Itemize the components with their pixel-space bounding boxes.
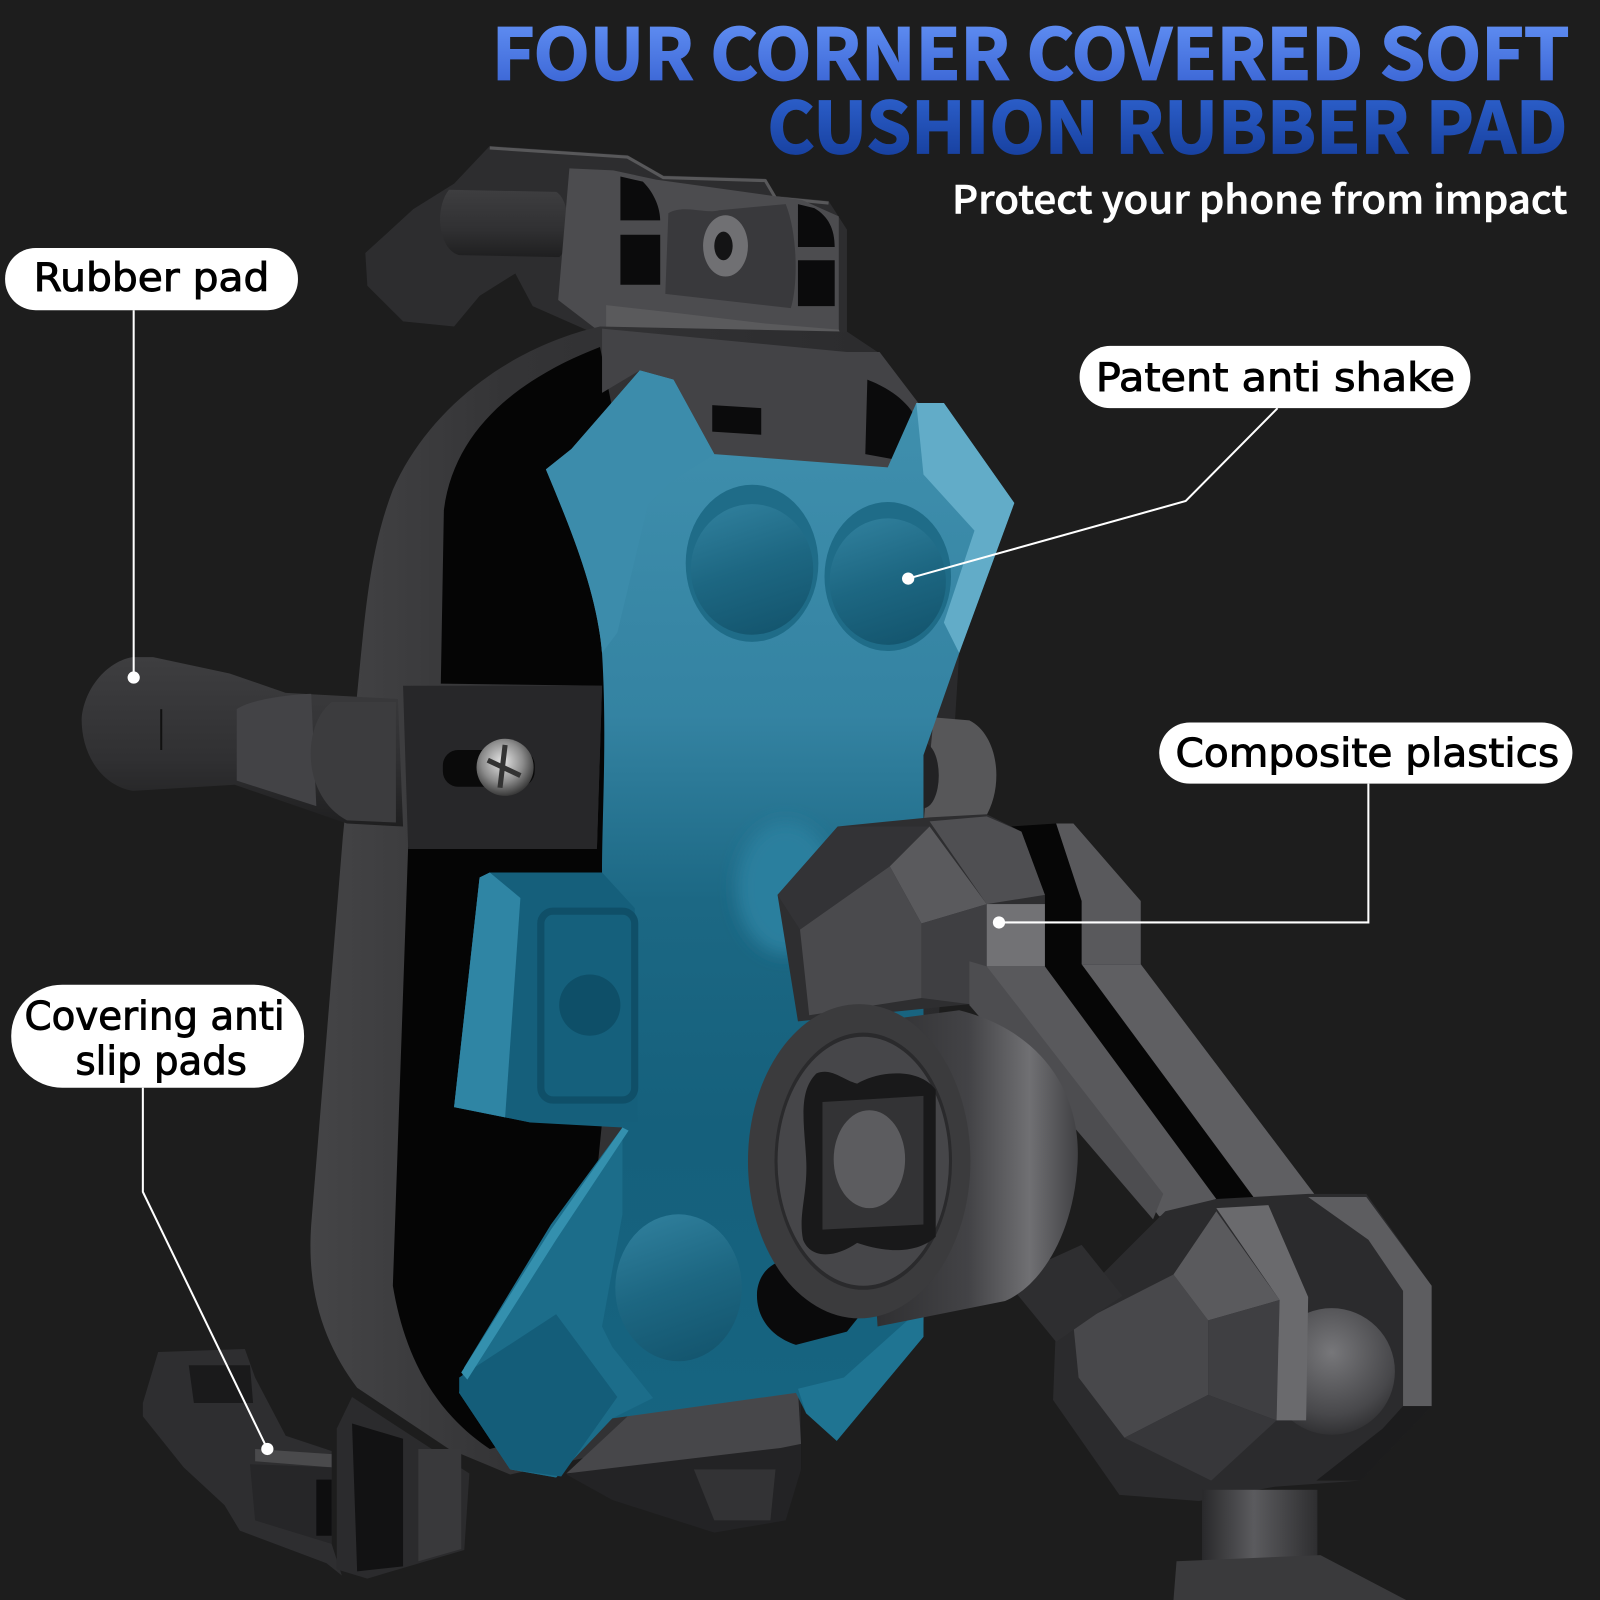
small tab behind pad xyxy=(908,717,996,824)
side mounting plate xyxy=(403,686,602,849)
bottom right clamp arm xyxy=(566,1388,801,1533)
subtitle: Protect your phone from impact xyxy=(952,169,1567,225)
callout: composite plastics xyxy=(993,722,1572,929)
bottom joint xyxy=(1053,1194,1432,1501)
callout: rubber pad xyxy=(5,248,298,684)
tab slot xyxy=(541,911,635,1100)
frame inner black recess xyxy=(393,347,633,1449)
pad upper highlight rim xyxy=(546,370,714,653)
mount base xyxy=(1173,1555,1406,1600)
callout: composite plastics: Composite plastics xyxy=(1176,731,1559,776)
screw xyxy=(477,739,534,796)
pad lower right chamfer xyxy=(798,1306,923,1441)
callout: patent anti shake: Patent anti shake xyxy=(1096,356,1455,401)
tab hole xyxy=(559,974,620,1036)
title: CUSHION RUBBER PAD xyxy=(767,72,1567,174)
plate window xyxy=(712,380,913,459)
left rubber clamp arm xyxy=(82,657,403,827)
title xyxy=(492,0,1569,174)
bottom left clamp arm xyxy=(143,1349,342,1576)
front arm xyxy=(969,961,1216,1216)
top joint xyxy=(778,814,1045,1021)
bottom frame leg xyxy=(337,1397,469,1579)
phone holder product illustration xyxy=(82,146,1432,1600)
lower arm shadow link xyxy=(1005,1245,1122,1342)
callout: covering anti slip pads: slip pads xyxy=(76,1039,247,1084)
top clamp arm xyxy=(365,146,849,352)
top plate behind pad xyxy=(602,329,918,469)
middle bump xyxy=(737,821,835,954)
screw slot xyxy=(443,750,535,787)
left tab side xyxy=(454,872,520,1117)
main frame shell xyxy=(310,327,959,1474)
rear arm xyxy=(1010,823,1314,1204)
callout: patent anti shake xyxy=(902,346,1470,585)
lower ball xyxy=(615,1214,742,1361)
upper right ball xyxy=(824,502,951,651)
blue rubber pad xyxy=(454,370,1014,1478)
title: FOUR CORNER COVERED SOFT xyxy=(492,0,1569,101)
round mount knob xyxy=(748,1004,1078,1327)
stem xyxy=(1202,1490,1317,1561)
upper left ball xyxy=(686,485,818,642)
left tab front xyxy=(454,872,638,1122)
callout: rubber pad: Rubber pad xyxy=(34,256,269,301)
pad lower left wing xyxy=(459,1128,653,1478)
callout: covering anti slip pads xyxy=(11,985,304,1455)
lower under-knob shadow xyxy=(757,1259,867,1345)
callout: covering anti slip pads: Covering anti xyxy=(24,995,285,1040)
arm flange xyxy=(969,961,1163,1219)
